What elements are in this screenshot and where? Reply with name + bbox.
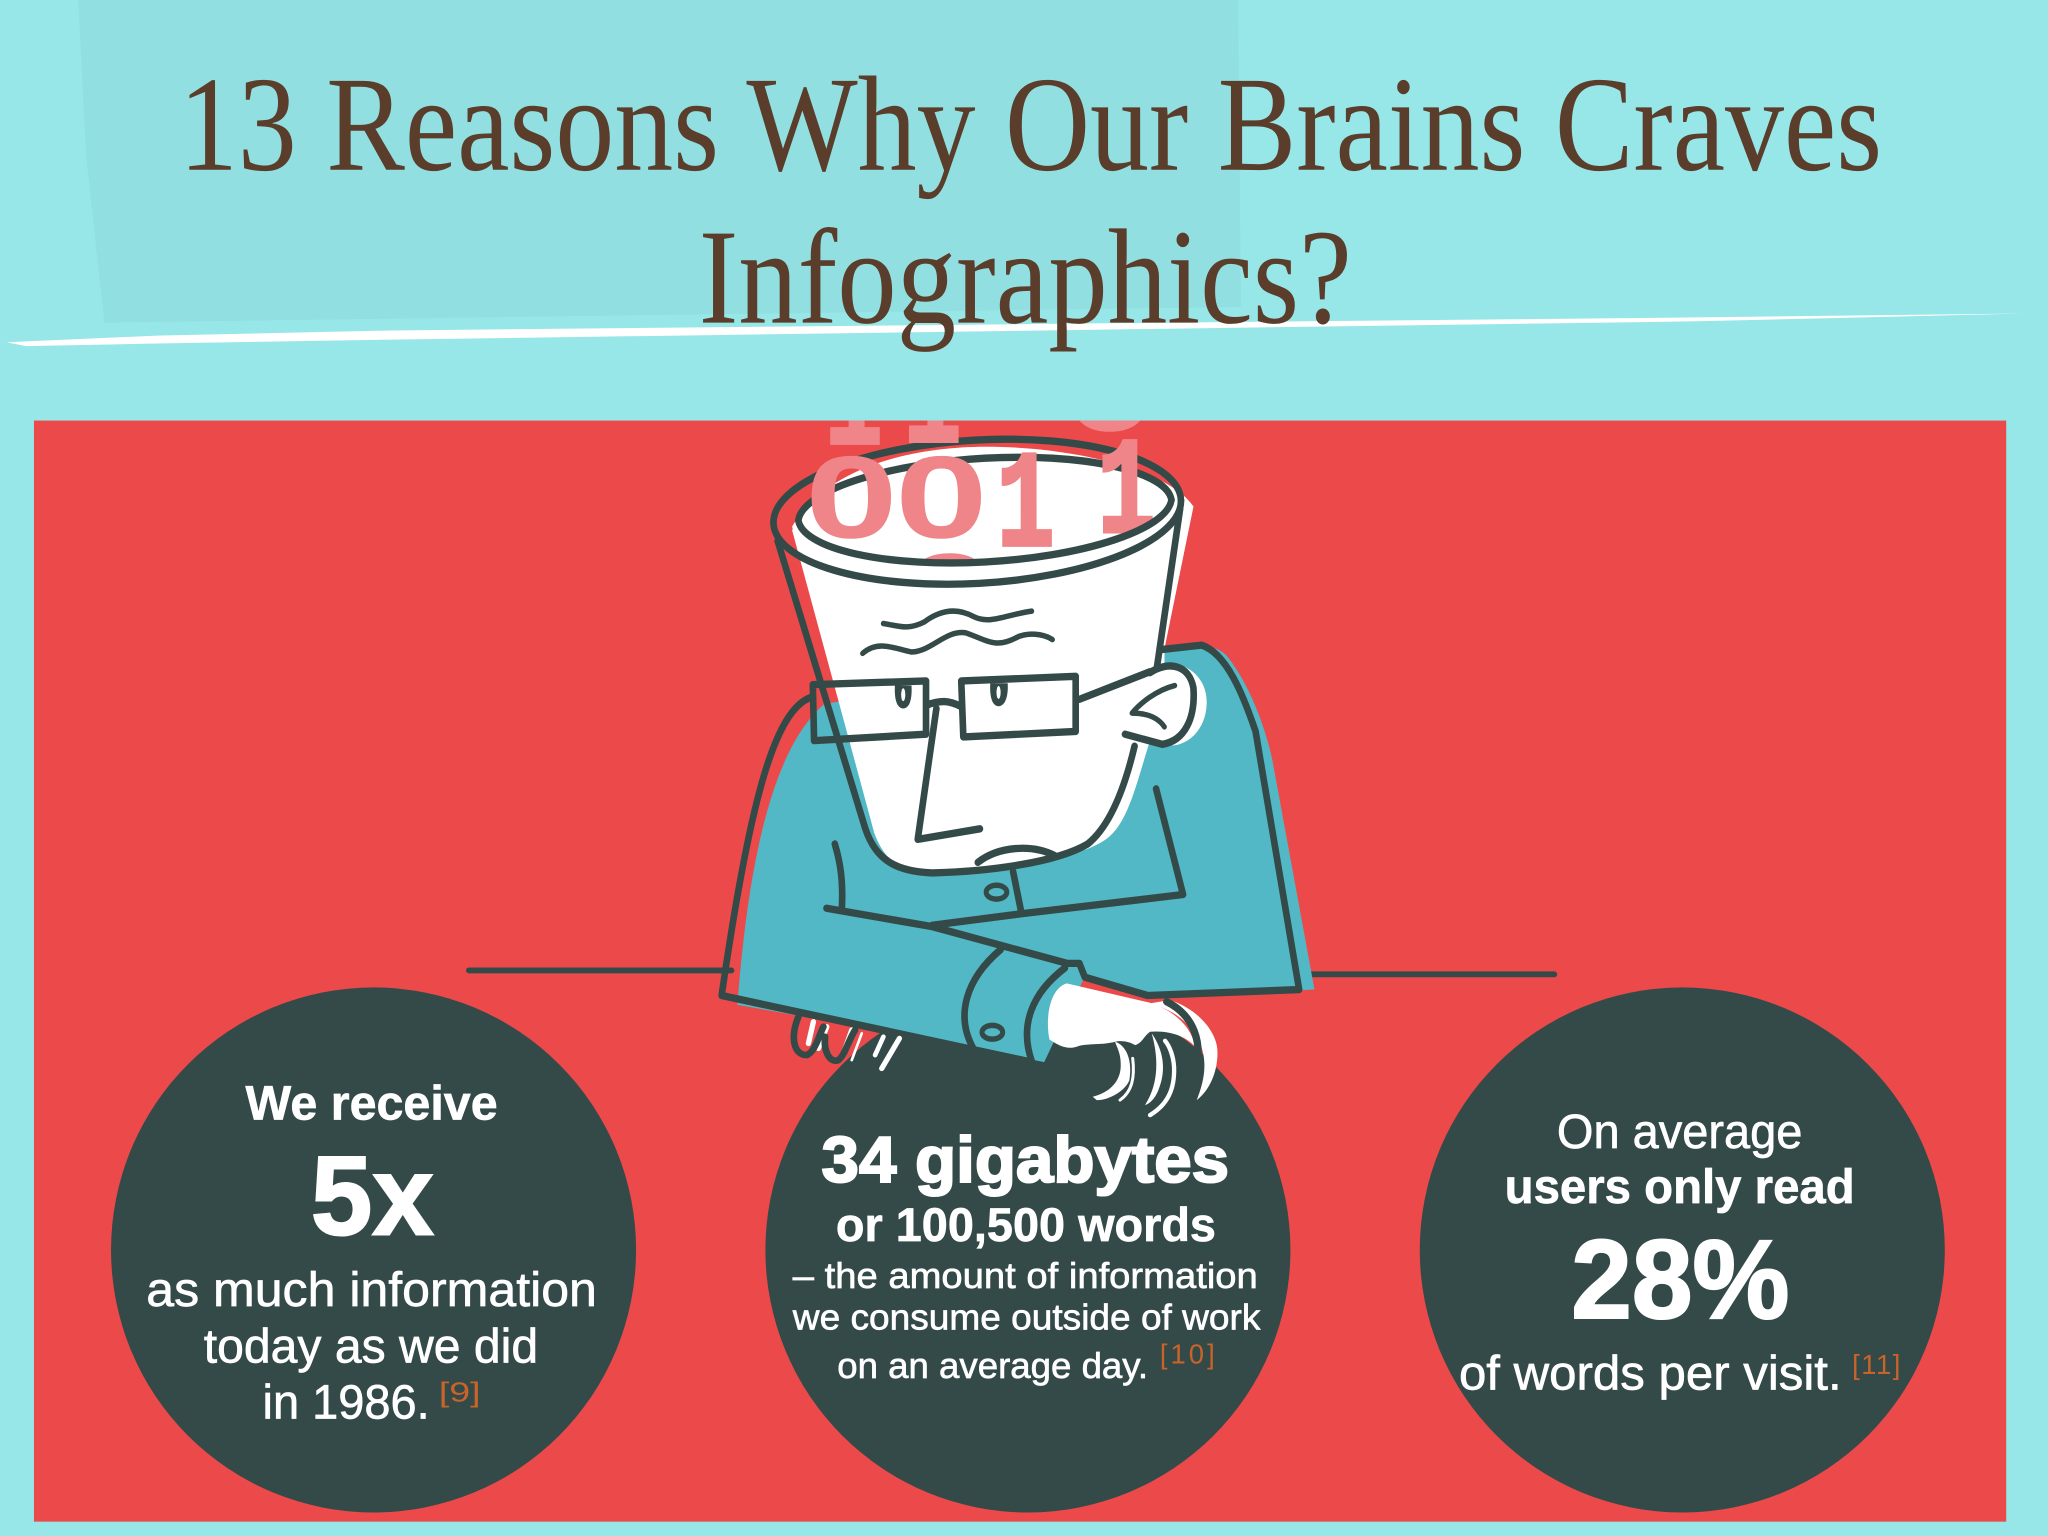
circle: left stat: today as we did — [204, 1319, 538, 1373]
circle: middle stat: – the amount of information — [793, 1255, 1258, 1296]
circle: right stat: [11] — [1852, 1349, 1900, 1380]
circle: middle stat: 34 gigabytes — [822, 1123, 1229, 1196]
title — [179, 50, 1882, 353]
head rim back arcs — [773, 439, 1181, 523]
ear — [1125, 666, 1194, 744]
nose — [918, 708, 980, 839]
circle: left stat: 5x — [311, 1132, 434, 1258]
ear inner — [1132, 686, 1175, 727]
circle: middle stat: we consume outside of work — [792, 1297, 1261, 1338]
left hand fingers under arm — [794, 1017, 899, 1068]
circle: right stat: of words per visit. — [1459, 1347, 1842, 1401]
binary digits falling into head: 0 — [805, 431, 898, 563]
binary digits falling into head: 1 — [824, 329, 883, 485]
circle: middle stat: [10] — [1160, 1339, 1215, 1370]
binary digits falling into head — [805, 324, 1157, 660]
circle: left stat: We receive — [246, 1076, 498, 1130]
circle: right stat: 28% — [1571, 1216, 1789, 1342]
circle: left stat: as much information — [146, 1263, 597, 1317]
binary digits falling into head: 1 — [1097, 417, 1155, 573]
circle: left stat: in 1986. — [263, 1375, 430, 1429]
shirt collar and outlines — [835, 789, 1183, 925]
head rim front and face outline — [773, 500, 1181, 873]
pupils — [895, 683, 1008, 708]
binary digits falling into head: 1 — [996, 431, 1055, 587]
lower face cover — [792, 500, 1193, 872]
left head side teal patch — [816, 704, 882, 858]
circle: left stat — [111, 987, 636, 1512]
white face — [792, 447, 1193, 872]
white brush stroke divider — [7, 313, 2024, 346]
circle: left stat: [9] — [439, 1376, 481, 1407]
binary digits falling into head: 0 — [895, 431, 988, 563]
mouth — [978, 848, 1055, 862]
binary digits falling into head: 0 — [1064, 324, 1157, 456]
glasses — [813, 672, 1150, 741]
ear white backing — [1131, 663, 1207, 745]
table line left — [469, 968, 731, 973]
sleeve cuff — [965, 950, 1065, 1061]
left shoulder and arm outline — [722, 645, 1299, 1062]
background textured patch — [78, 0, 1241, 323]
circle: right stat: users only read — [1505, 1160, 1855, 1214]
right hand with fingers — [1048, 983, 1217, 1115]
character: worried man with open head — [718, 420, 1314, 1118]
circle: right stat — [1420, 987, 1945, 1512]
binary digits falling into head: 1 — [903, 327, 961, 483]
circle: right stat: On average — [1557, 1105, 1802, 1159]
title: Infographics? — [699, 203, 1352, 353]
forehead wrinkles — [863, 611, 1052, 653]
circle: middle stat: on an average day. — [837, 1345, 1148, 1386]
table line right — [1300, 972, 1554, 977]
red panel — [34, 421, 2006, 1522]
shirt and body — [737, 646, 1314, 1062]
circle: middle stat: or 100,500 words — [836, 1198, 1216, 1251]
circle: middle stat — [765, 987, 1290, 1512]
binary digits falling into head: 0 — [903, 529, 996, 660]
